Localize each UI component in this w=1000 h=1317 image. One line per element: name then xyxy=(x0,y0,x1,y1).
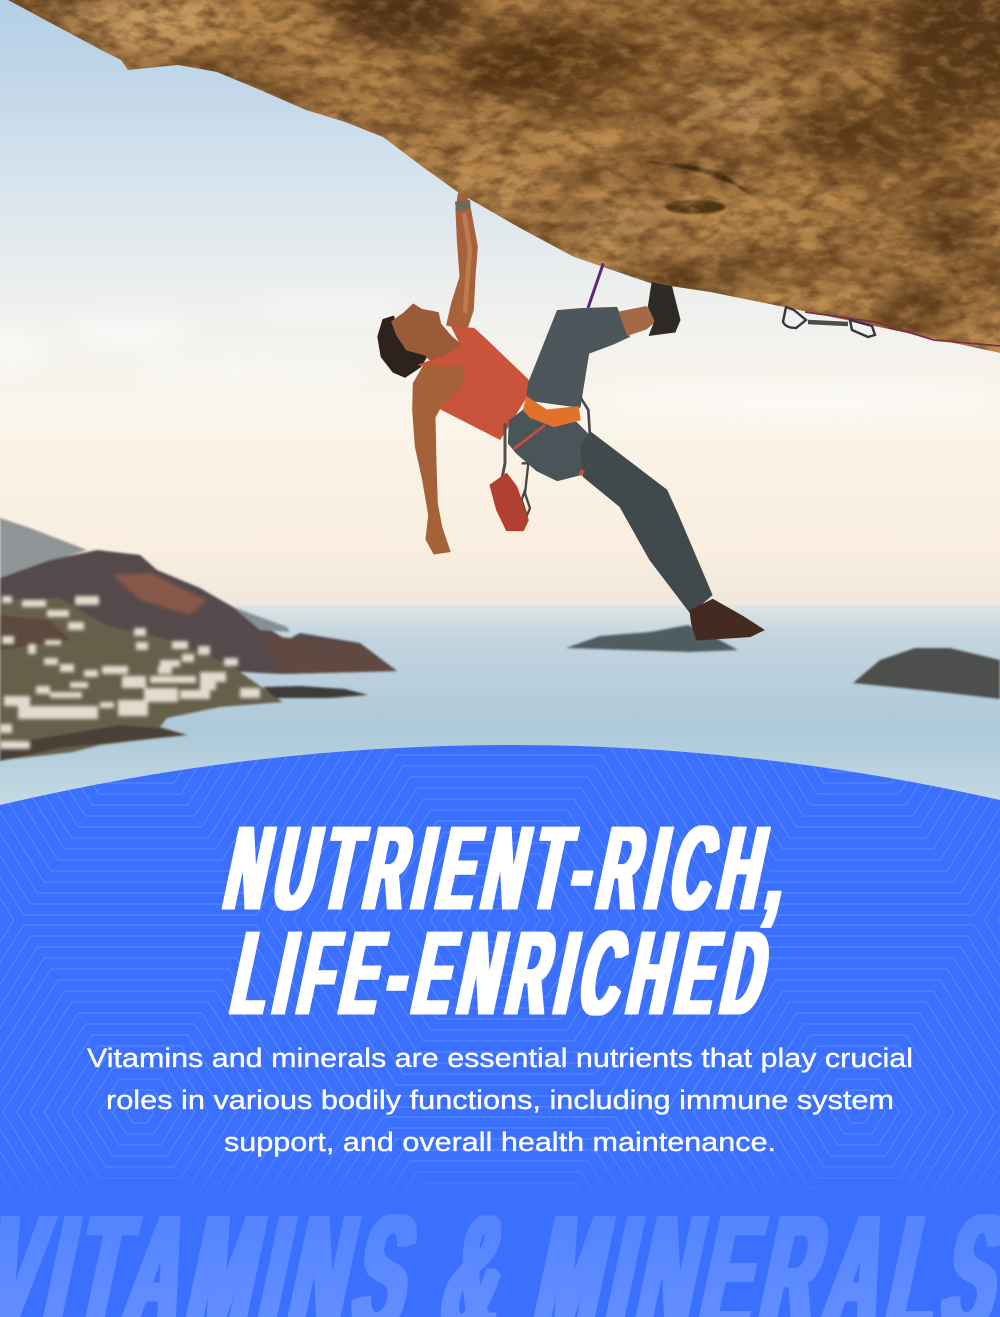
harness belt xyxy=(523,397,580,427)
heading: LIFE-ENRICHED xyxy=(223,907,780,1039)
panel: blue section xyxy=(0,745,1000,1194)
climber xyxy=(378,193,764,640)
harness strap and gear loops xyxy=(502,397,598,516)
hexagon line pattern xyxy=(0,748,1000,1194)
town buildings xyxy=(0,596,260,749)
coastal hills and town xyxy=(0,518,397,761)
body text: roles in various bodily functions, including immune system xyxy=(106,1085,894,1115)
heading xyxy=(216,802,801,1039)
calf xyxy=(618,306,657,336)
raised arm xyxy=(447,193,477,330)
rock overhang xyxy=(8,0,1000,353)
lower arm and chest xyxy=(413,365,465,554)
reddish hillside xyxy=(113,573,207,615)
body text: support, and overall health maintenance. xyxy=(224,1127,776,1157)
face and neck xyxy=(392,304,463,360)
hip xyxy=(508,410,587,481)
lower shoe xyxy=(690,599,764,640)
chalk bag xyxy=(490,473,528,531)
tank top xyxy=(418,327,528,439)
bent leg xyxy=(527,307,629,407)
rope xyxy=(588,263,603,308)
watch xyxy=(455,200,471,212)
photo background: sky xyxy=(0,0,1000,606)
upper shoe xyxy=(648,283,680,335)
arm highlight xyxy=(464,213,470,313)
quickdraw and rope xyxy=(783,307,1000,346)
body text xyxy=(87,1043,913,1157)
body text: Vitamins and minerals are essential nutrients that play crucial xyxy=(87,1043,913,1073)
sea xyxy=(0,605,1000,815)
lower leg xyxy=(581,432,712,613)
far islands xyxy=(566,625,1000,699)
hair xyxy=(378,317,428,377)
heading: NUTRIENT-RICH, xyxy=(216,802,801,934)
